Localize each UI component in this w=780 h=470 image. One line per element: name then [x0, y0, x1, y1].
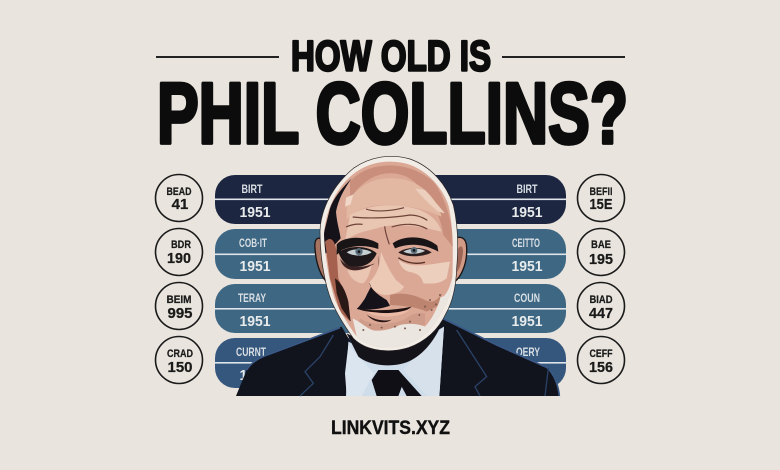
panel: left circles: CRAD — [167, 348, 193, 360]
left cheek highlight — [347, 265, 372, 283]
panel: right circles: 195 — [589, 251, 613, 268]
left brow — [337, 238, 378, 255]
bar row 2: 1951 — [240, 258, 270, 275]
side hair shadow — [324, 178, 352, 254]
nose highlight — [369, 252, 404, 295]
moustache area — [390, 293, 442, 312]
panel: left circles: BEIM — [166, 294, 192, 306]
bar row 3: COUN — [514, 291, 540, 305]
bar row 3: 1951 — [240, 313, 270, 330]
bar row 2: CEITTO — [512, 236, 540, 250]
title line 1: HOW OLD IS — [291, 32, 491, 80]
under eye line — [398, 258, 425, 263]
stubble dots — [362, 294, 441, 331]
head — [315, 156, 467, 352]
footer url: LINKVITS.XYZ — [331, 418, 450, 439]
panel: left circles: 995 — [168, 305, 192, 322]
panel: bars — [215, 175, 566, 388]
suit and shirt — [236, 317, 560, 396]
nose shadow — [357, 255, 390, 310]
bar row 2: COB·IT — [239, 236, 267, 250]
tie — [372, 370, 405, 396]
skin base — [324, 162, 453, 347]
right cheek highlight — [398, 260, 450, 284]
bar row 1 — [215, 175, 566, 224]
neck shadow — [347, 320, 443, 365]
bar row 2 — [215, 229, 566, 279]
panel: right circles — [578, 174, 624, 384]
panel: left circles: 190 — [167, 250, 191, 267]
panel: right circles: 447 — [589, 305, 613, 322]
panel: right circles: BEFII — [590, 186, 612, 198]
bar row 1: BIRT — [516, 182, 538, 196]
panel: right circles: 156 — [589, 359, 613, 376]
right ear — [452, 237, 467, 283]
crown shading — [350, 165, 454, 248]
bar row 1: 1951 — [240, 204, 270, 221]
panel: left circles: 41 — [172, 196, 188, 213]
left temple shadow — [325, 239, 350, 322]
bar row 1: BIRT — [242, 182, 263, 196]
bar row 1: 1951 — [512, 204, 542, 221]
under eye shadow — [340, 258, 375, 270]
stubble beard — [353, 278, 453, 352]
panel: right circles: BAE — [591, 239, 611, 251]
hair and head outline — [320, 156, 458, 351]
bar row 4: OERY — [516, 345, 540, 359]
panel: left circles: BEAD — [166, 186, 192, 198]
panel: left circles: 150 — [168, 359, 192, 376]
bar row 3 — [215, 284, 566, 333]
shirt — [346, 327, 444, 396]
panel: right circles: BIAD — [590, 294, 613, 306]
bar row 4: CURNT — [236, 345, 266, 359]
panel: right circles: 15E — [590, 196, 612, 213]
right brow — [393, 237, 438, 252]
illustration: portrait — [236, 156, 560, 396]
panel: right circles: CEFF — [590, 348, 613, 360]
bar row 2: 1951 — [512, 258, 542, 275]
bar row 3: TERAY — [238, 291, 266, 305]
left eye — [338, 247, 377, 267]
chin skin — [358, 313, 425, 332]
bar row 4: 1951 — [240, 367, 270, 384]
forehead highlight — [347, 178, 442, 220]
title — [156, 32, 628, 162]
forehead wrinkles — [346, 208, 427, 244]
panel: left circles: BDR — [171, 239, 191, 251]
lower lip — [367, 309, 410, 317]
panel: left circles — [156, 174, 202, 384]
left face hatch shadow — [335, 278, 351, 322]
mouth — [357, 307, 412, 313]
bar row 3: 1951 — [512, 313, 542, 330]
face details — [322, 165, 454, 352]
bar row 4 — [215, 338, 566, 388]
right eye — [398, 247, 432, 256]
suit jacket — [236, 317, 560, 396]
left ear — [315, 238, 328, 283]
